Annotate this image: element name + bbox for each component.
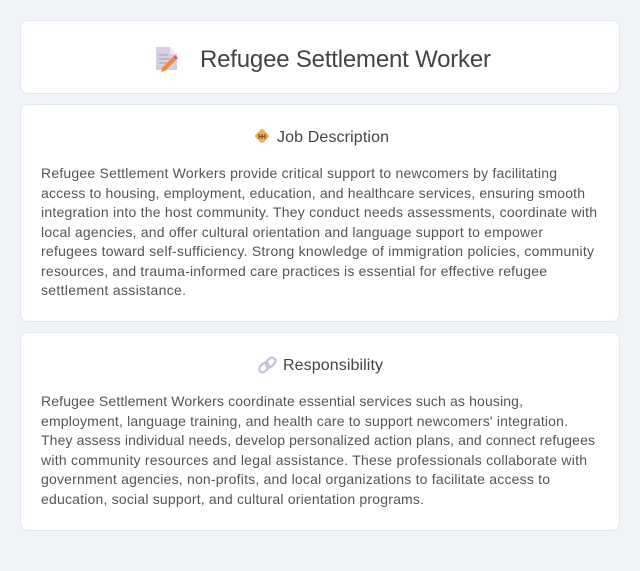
text block: responsibility: education, social support, and cultural orientation programs.: [41, 491, 424, 507]
text block: job description: settlement assistance.: [41, 282, 186, 298]
text block: job description: resources, and trauma-informed care practices is essential for effective refugee: [41, 263, 547, 279]
heading: job description: Job Description: [277, 129, 389, 146]
text block: responsibility: employment, language training, and health care to support newcomers' integration.: [41, 413, 568, 429]
icon: document with pencil: [156, 47, 178, 72]
text block: responsibility: They assess individual needs, develop personalized action plans, and connect refugees: [41, 432, 595, 448]
panel: job description card: [20, 104, 620, 322]
text block: job description: Refugee Settlement Workers provide critical support to newcomers by facilitating: [41, 165, 557, 181]
text block: job description: access to housing, employment, education, and healthcare services, ensuring smooth: [41, 185, 585, 201]
text block: job description: local agencies, and offer cultural orientation and language support to empower: [41, 224, 543, 240]
panel: responsibility card: [20, 332, 620, 531]
panel: title card: [20, 20, 620, 94]
text block: job description: integration into the host community. They conduct needs assessments, coordinate with: [41, 204, 597, 220]
text block: responsibility: government agencies, non-profits, and local organizations to facilitate access to: [41, 471, 550, 487]
text block: responsibility: with community resources and legal assistance. These professionals collaborate with: [40, 452, 587, 468]
heading: responsibility: Responsibility: [283, 357, 383, 374]
text block: responsibility: [40, 393, 595, 507]
text block: responsibility: Refugee Settlement Workers coordinate essential services such as housing,: [41, 393, 523, 409]
icon: chain link: [258, 356, 277, 374]
text block: job description: refugees toward self-sufficiency. Strong knowledge of immigration policies, community: [41, 243, 594, 259]
text block: job description: [41, 165, 597, 298]
title: Refugee Settlement Worker: [200, 46, 491, 73]
icon: diamond sign: [254, 128, 270, 144]
